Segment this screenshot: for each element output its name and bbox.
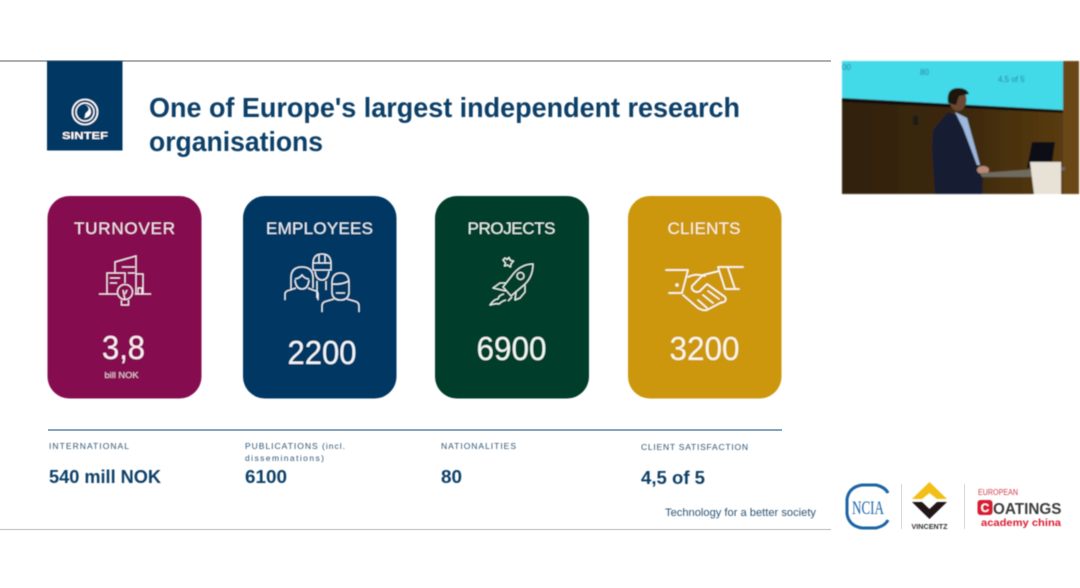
logo: Vincentz <box>912 482 948 531</box>
video: speaker inset: 4,5 of 5 <box>998 75 1025 84</box>
panel: turnover: TURNOVER <box>74 219 175 238</box>
tagline: Technology for a better society <box>665 507 816 519</box>
stat: publications: PUBLICATIONS (incl. <box>245 441 345 451</box>
stat: nationalities: NATIONALITIES <box>441 441 516 451</box>
panel: turnover: bill NOK <box>104 371 139 380</box>
stat: client satisfaction: CLIENT SATISFACTION <box>641 442 748 452</box>
video: speaker inset: 00 <box>842 63 851 72</box>
panel: clients: CLIENTS <box>668 219 740 238</box>
stat: international: 540 mill NOK <box>49 467 161 487</box>
logo: Vincentz: VINCENTZ <box>912 522 948 531</box>
panel: projects <box>435 196 589 398</box>
title: organisations <box>149 126 323 157</box>
logo: European Coatings academy china: academy china <box>981 517 1061 529</box>
icon: handshake <box>666 267 743 310</box>
panel: projects: 6900 <box>476 330 546 367</box>
panel: turnover <box>48 196 202 398</box>
logo: European Coatings academy china: EUROPEAN <box>978 488 1018 497</box>
title: One of Europe's largest independent research <box>149 92 740 123</box>
panel: turnover: 3,8 <box>102 329 145 366</box>
logo: European Coatings academy china: C <box>981 501 990 515</box>
title <box>149 92 740 157</box>
logo: SINTEF <box>47 61 122 150</box>
logo: SINTEF: SINTEF <box>62 131 108 142</box>
icon: building and light bulb <box>99 256 151 305</box>
panel: employees <box>243 196 396 398</box>
laptop and lectern <box>1027 142 1055 168</box>
stat: publications: 6100 <box>245 467 287 487</box>
panel: employees: EMPLOYEES <box>266 219 373 238</box>
panel: clients: 3200 <box>670 330 740 367</box>
panel: clients <box>628 196 782 398</box>
video: speaker inset: 80 <box>920 68 929 77</box>
stat: international <box>49 441 161 487</box>
speaker <box>932 112 983 194</box>
icon: three people <box>285 254 359 312</box>
logo: NCIA: NCIA <box>852 498 884 519</box>
stat: client satisfaction <box>641 442 748 488</box>
logo: NCIA <box>847 485 888 528</box>
stat: publications: disseminations) <box>245 453 324 463</box>
panel: projects: PROJECTS <box>468 219 556 238</box>
video: speaker inset <box>842 61 1079 194</box>
logo: European Coatings academy china <box>978 488 1062 529</box>
panel: employees: 2200 <box>288 334 356 371</box>
stat: publications <box>245 441 345 487</box>
stat: client satisfaction: 4,5 of 5 <box>641 468 705 488</box>
stat: nationalities <box>441 441 516 487</box>
logo: European Coatings academy china: OATINGS <box>993 501 1062 518</box>
icon: rocket <box>490 258 533 305</box>
stat: international: INTERNATIONAL <box>49 441 129 451</box>
stat: nationalities: 80 <box>441 467 462 487</box>
